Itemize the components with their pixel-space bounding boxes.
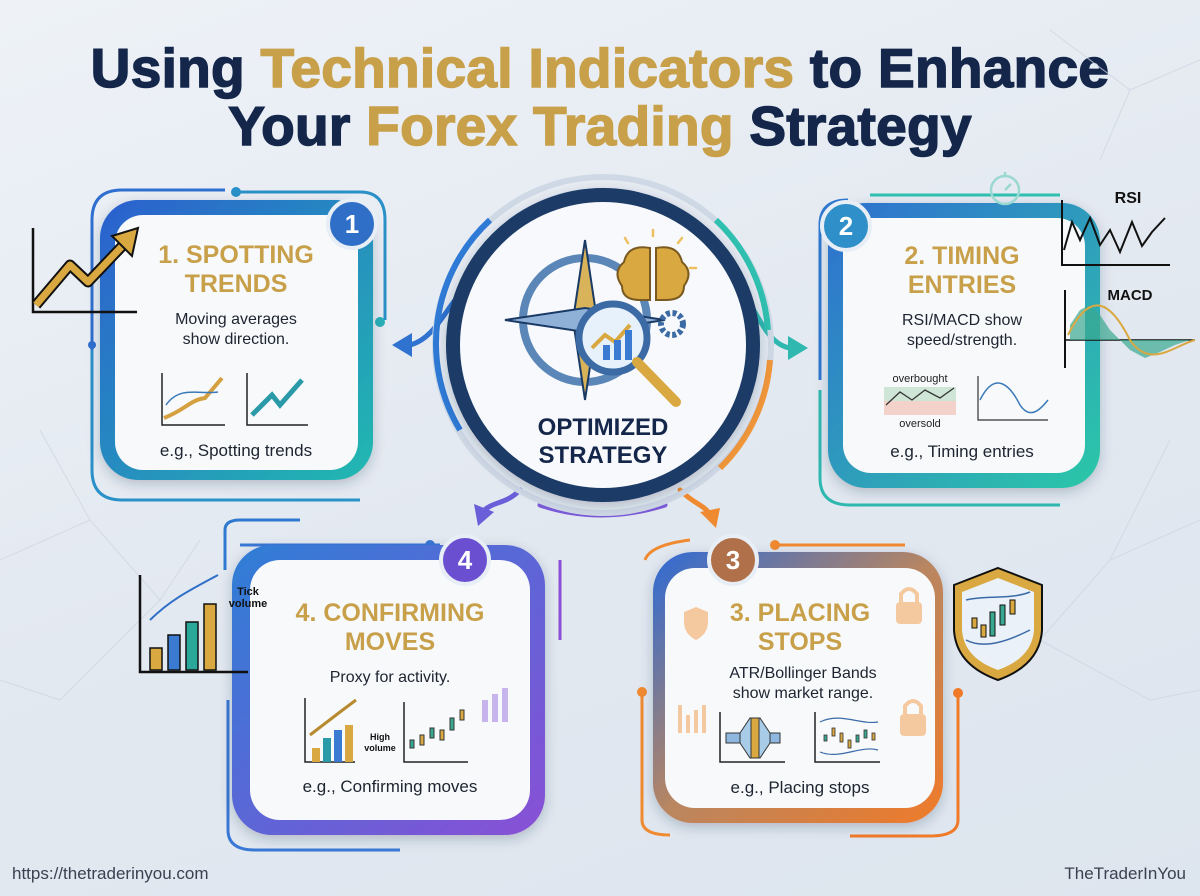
icon: gear — [661, 313, 683, 335]
panel: card 2 timing entries: 2. TIMING — [904, 242, 1020, 270]
badge 4 — [441, 536, 489, 584]
panel: card 4 confirming moves: Proxy for activity. — [330, 669, 450, 686]
panel: card 2 timing entries: 2 — [839, 211, 853, 241]
badge 1 — [328, 200, 376, 248]
icon: brain — [617, 230, 696, 300]
panel: card 4 confirming moves: 4. CONFIRMING — [296, 599, 484, 627]
panel: card 1 spotting trends: Moving averages — [175, 311, 297, 328]
title: Your Forex Trading Strategy — [228, 95, 972, 157]
panel: card 2 timing entries: ENTRIES — [908, 271, 1016, 299]
panel: card 1 spotting trends — [88, 187, 385, 500]
center circle — [435, 177, 771, 513]
panel: card 2 timing entries: e.g., Timing entries — [890, 442, 1034, 461]
connector arrows — [410, 300, 790, 515]
panel: card 3 placing stops: 3. PLACING — [730, 599, 870, 627]
panel: card 1 spotting trends: show direction. — [183, 331, 289, 348]
icon: compass with magnifier — [505, 240, 676, 402]
panel: card 1 spotting trends: 1. SPOTTING — [158, 241, 314, 269]
icon: volume chart left: Tick — [237, 586, 260, 598]
icon: volume chart left: volume — [229, 598, 267, 610]
center circle: STRATEGY — [539, 442, 667, 469]
panel: card 1 spotting trends: 1 — [345, 209, 359, 239]
panel: card 4 confirming moves: volume — [364, 743, 396, 753]
icon: trend chart left — [33, 228, 138, 312]
panel: card 4 confirming moves: 4 — [458, 545, 473, 575]
center label: OPTIMIZED — [538, 414, 668, 441]
panel: card 4 confirming moves — [225, 520, 560, 850]
panel: card 4 confirming moves: MOVES — [345, 628, 435, 656]
icon: RSI MACD charts right: MACD — [1108, 287, 1153, 304]
icon: stopwatch — [991, 172, 1019, 204]
footer url: https://thetraderinyou.com — [12, 864, 209, 883]
title — [91, 37, 1109, 158]
panel: card 3 placing stops: 3 — [726, 545, 740, 575]
panel: card 2 timing entries — [820, 195, 1100, 505]
panel: card 3 placing stops: e.g., Placing stops — [731, 778, 869, 797]
panel: card 3 placing stops — [637, 536, 963, 836]
panel: card 3 placing stops: show market range. — [733, 685, 873, 702]
panel: card 2 timing entries: speed/strength. — [907, 332, 1017, 349]
icon: shield with candles — [954, 568, 1042, 680]
icon: volume chart left — [140, 575, 267, 672]
panel: card 1 spotting trends: e.g., Spotting trends — [160, 441, 312, 460]
panel: card 2 timing entries: RSI/MACD show — [902, 312, 1022, 329]
icon: RSI MACD charts right: RSI — [1115, 190, 1141, 207]
title: Using Technical Indicators to Enhance — [91, 37, 1109, 99]
background network lines — [0, 30, 1200, 700]
panel: card 3 placing stops: ATR/Bollinger Bands — [729, 665, 877, 682]
badge 3 — [709, 536, 757, 584]
panel: card 4 confirming moves: e.g., Confirming moves — [303, 777, 477, 796]
panel: card 3 placing stops: STOPS — [758, 628, 842, 656]
panel: card 4 confirming moves: High — [370, 732, 390, 742]
panel: card 2 timing entries: oversold — [899, 418, 941, 430]
panel: card 1 spotting trends: TRENDS — [185, 270, 287, 298]
icon: RSI MACD charts right — [1062, 190, 1195, 368]
footer brand: TheTraderInYou — [1064, 864, 1186, 883]
panel: card 2 timing entries: overbought — [892, 373, 948, 385]
badge 2 — [822, 202, 870, 250]
